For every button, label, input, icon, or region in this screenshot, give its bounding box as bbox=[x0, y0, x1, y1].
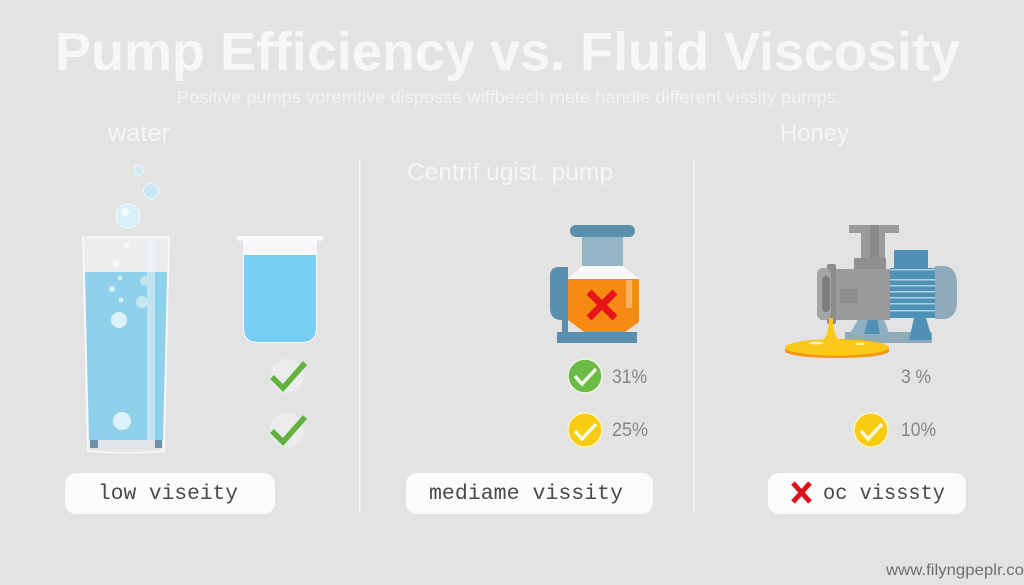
icon: beaker of water bbox=[237, 236, 323, 343]
column heading: centrifugal pump: Centrif ugist. pump bbox=[407, 159, 613, 186]
divider left bbox=[359, 160, 360, 513]
value: 3%: 3 % bbox=[901, 367, 931, 388]
label: medium viscosity: mediame vissity bbox=[429, 483, 623, 506]
icon: green check bbox=[568, 359, 602, 393]
label: medium viscosity bbox=[406, 473, 653, 514]
column heading: honey: Honey bbox=[780, 120, 849, 147]
label: high viscosity with red cross: oc visssty bbox=[823, 483, 945, 506]
icon: tall glass of water bbox=[83, 237, 169, 453]
subtitle: Positive pumps voremtive disposse wiffbeech mete handle different vissity pumps. bbox=[177, 87, 841, 107]
label: low viscosity: low viseity bbox=[98, 483, 238, 506]
icon: yellow check honey bbox=[854, 413, 888, 447]
website credit: www.filyngpeplr.co bbox=[885, 562, 1024, 579]
value: 25%: 25% bbox=[612, 420, 648, 441]
label: low viscosity bbox=[65, 473, 275, 514]
label: high viscosity with red cross bbox=[768, 473, 966, 514]
icon: water check 2 bbox=[270, 413, 305, 447]
divider right bbox=[693, 160, 694, 513]
value: 31%: 31% bbox=[612, 367, 647, 388]
title: Pump Efficiency vs. Fluid Viscosity bbox=[55, 22, 960, 82]
value: 10%: 10% bbox=[901, 420, 936, 441]
icon: water check 1 bbox=[270, 359, 305, 393]
column heading: water: water bbox=[107, 120, 170, 147]
icon: medium pump with red cross bbox=[550, 225, 639, 343]
icon: rising bubbles bbox=[116, 165, 158, 228]
icon: yellow check bbox=[568, 413, 602, 447]
icon: leaking centrifugal pump bbox=[785, 225, 957, 358]
